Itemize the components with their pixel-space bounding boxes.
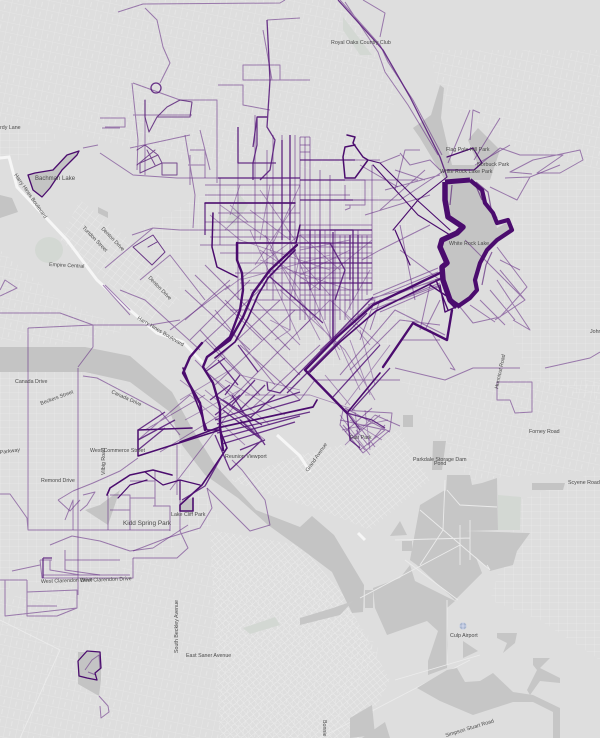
- thick white rock lake loop: [440, 180, 512, 307]
- place labels: West Clarendon Drive: [41, 577, 93, 585]
- place labels: Remond Drive: [41, 478, 75, 484]
- airport roads: [360, 480, 497, 680]
- place labels: Norbuck Park: [477, 162, 509, 168]
- place labels: Kidd Spring Park: [123, 520, 172, 527]
- park greens: [35, 17, 521, 634]
- place labels: White Rock Lake: [449, 241, 489, 247]
- place labels: White Rock Lake Park: [440, 169, 493, 175]
- place labels: Grand Avenue: [305, 442, 329, 473]
- place labels: Vilbig Road: [101, 448, 107, 475]
- place labels: Denton Drive: [147, 275, 172, 302]
- place labels: Canada Drive: [15, 379, 47, 385]
- place labels: Empire Central: [49, 262, 84, 270]
- place labels: Culp Airport: [450, 633, 478, 639]
- place labels: Reunion Viewport: [225, 454, 267, 460]
- bachman lake and other ponds: [0, 151, 565, 696]
- place labels: Harry Hines Boulevard: [136, 316, 185, 348]
- place labels: Parkdale Storage Dam: [413, 457, 467, 463]
- place labels: Denton Drive: [100, 226, 125, 253]
- place labels: Bachman Lake: [35, 176, 76, 182]
- place labels: Fair Park: [350, 435, 372, 441]
- place labels: West Clarendon Drive: [80, 576, 132, 584]
- place labels: Beckers Street: [40, 389, 75, 407]
- main routes and diagonals: [28, 20, 482, 680]
- place labels: West Commerce Street: [90, 448, 145, 454]
- airport area: [300, 475, 560, 738]
- place labels: Parkway: [0, 447, 21, 456]
- place labels: Lake Cliff Park: [171, 512, 206, 518]
- place labels: Harry Hines Boulevard: [12, 173, 48, 220]
- lake side thin routes: [320, 110, 583, 375]
- river: [0, 347, 364, 613]
- thin running routes: north and west: [0, 0, 440, 367]
- place labels: Hunnicut Road: [494, 354, 507, 389]
- place labels: East Saner Avenue: [186, 653, 231, 659]
- place labels: Canada Drive: [110, 389, 142, 408]
- place labels: Flag Pole Hill Park: [446, 147, 490, 153]
- white rock lake and creek: [413, 85, 512, 307]
- place labels: Turtdon Street: [81, 225, 109, 254]
- thin routes: south west: [0, 328, 600, 718]
- place labels: Forney Road: [529, 429, 560, 435]
- place labels: rdy Lane: [0, 125, 21, 131]
- downtown diagonal street routes: [180, 265, 390, 470]
- trail northeast to the lake: [338, 0, 447, 177]
- place labels: Pond: [434, 461, 446, 467]
- place labels: Scyene Road: [568, 480, 600, 486]
- icon: airport: [459, 622, 467, 630]
- central street grid routes: [205, 115, 418, 360]
- fair park cluster: [340, 408, 400, 455]
- highways: [0, 157, 470, 738]
- place labels: South Beckley Avenue: [174, 600, 180, 653]
- place labels: Royal Oaks Country Club: [331, 40, 391, 46]
